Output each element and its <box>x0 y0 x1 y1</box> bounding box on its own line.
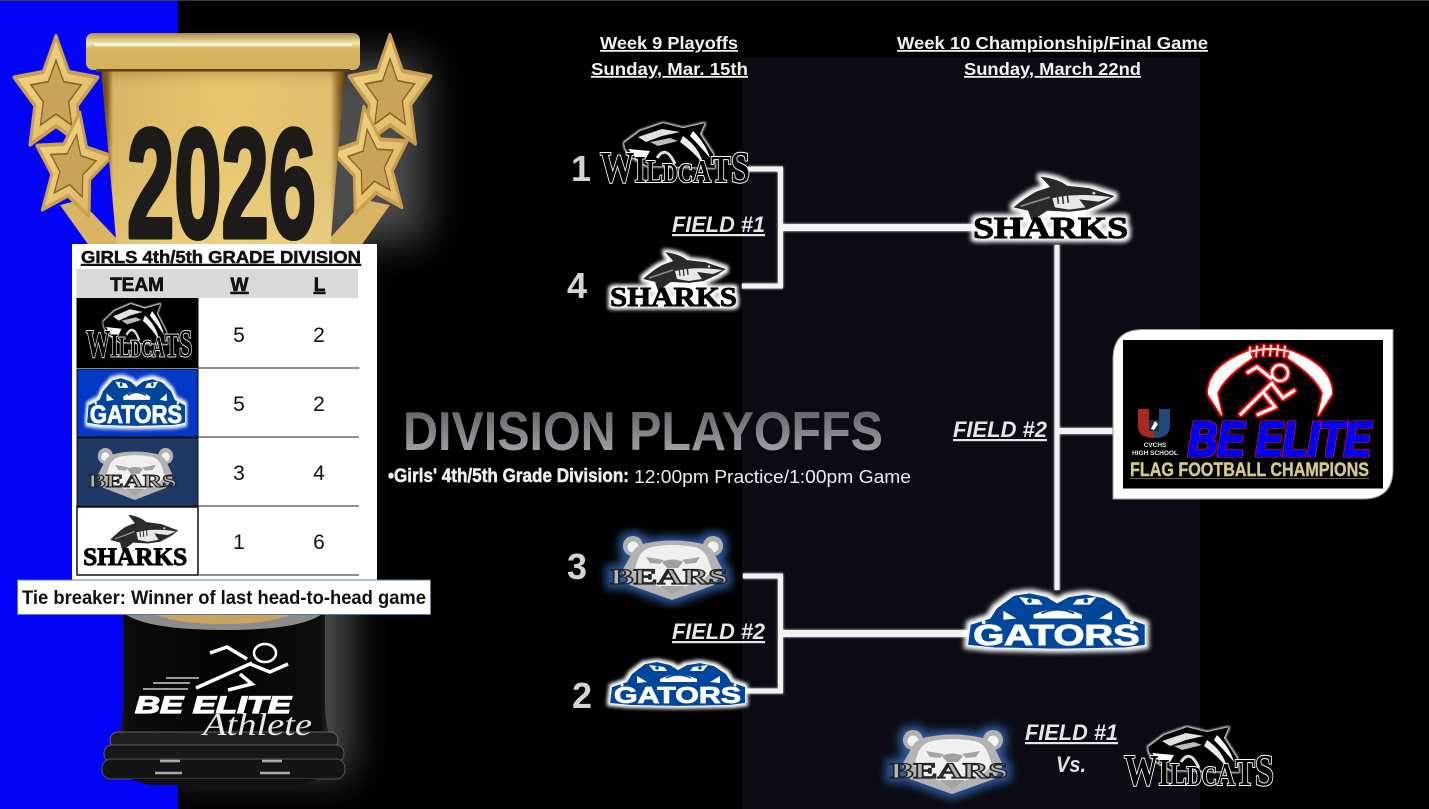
row: Wildcats: 5 <box>233 324 245 347</box>
bracket lines <box>742 169 1115 691</box>
heading: week 10: Sunday, March 22nd <box>964 59 1141 79</box>
table header: W <box>231 275 249 296</box>
logo: Sharks finalist <box>973 177 1128 245</box>
logo: Bears: BEARS <box>88 471 177 491</box>
heading: week 9: Week 9 Playoffs <box>600 33 738 53</box>
label: field 1 semifinal: FIELD #1 <box>672 212 765 237</box>
base foot <box>102 732 345 785</box>
row: Sharks: 1 <box>233 531 245 554</box>
schedule line <box>388 466 911 487</box>
schedule line: •Girls' 4th/5th Grade Division: <box>388 466 629 487</box>
seed 1: 1 <box>571 148 591 189</box>
icon: gold trophy <box>14 33 431 270</box>
row: Wildcats <box>76 298 325 368</box>
label: field 2 semifinal: FIELD #2 <box>672 619 766 644</box>
Be Elite athlete logo: BE ELITE <box>135 692 292 719</box>
schedule line: 12:00pm Practice/1:00pm Game <box>634 466 911 487</box>
row: Gators: 2 <box>313 393 325 416</box>
row: Sharks: 6 <box>313 531 325 554</box>
table header: TEAM <box>110 275 164 296</box>
table header <box>76 269 358 298</box>
row: Sharks <box>77 507 325 575</box>
heading: week 9: Sunday, Mar. 15th <box>591 59 748 79</box>
row: Wildcats: 2 <box>313 324 325 347</box>
base column <box>117 612 331 738</box>
base gold rim <box>125 614 322 630</box>
trophy rim <box>86 33 360 72</box>
heading: week 10 <box>897 33 1208 79</box>
row: Bears: 3 <box>233 462 245 485</box>
Be Elite athlete logo: Athlete <box>201 706 312 742</box>
trophy base <box>102 612 345 785</box>
year 2026: 2026 <box>127 97 316 270</box>
label: versus: Vs. <box>1056 752 1086 777</box>
flag football champions: FLAG FOOTBALL CHAMPIONS <box>1130 460 1369 481</box>
logo: Wildcats seed 1 <box>600 123 750 192</box>
school name: HIGH SCHOOL <box>1132 450 1178 457</box>
title: division playoffs: DIVISION PLAYOFFS <box>403 400 883 462</box>
callout: tie breaker: Tie breaker: Winner of last head-to-head game <box>22 588 426 609</box>
row: Gators <box>77 369 325 437</box>
logo: Sharks: SHARKS <box>83 544 187 571</box>
row: Bears <box>77 438 325 506</box>
logo: Bears seed 3 <box>610 536 728 600</box>
row: Gators: 5 <box>233 393 245 416</box>
seed 2: 2 <box>572 675 592 716</box>
callout: tie breaker <box>18 580 430 614</box>
logo: Sharks finalist: SHARKS <box>973 211 1128 245</box>
logo: Bears consolation <box>890 730 1008 794</box>
heading: week 9 <box>591 33 748 79</box>
icon: football outline <box>1208 345 1332 416</box>
label: field 2 final: FIELD #2 <box>953 417 1048 442</box>
icon: running figure <box>143 644 288 690</box>
logo: Wildcats consolation: WILDCATS <box>1124 746 1274 795</box>
trophy glow <box>170 60 425 775</box>
label: field 1 consolation: FIELD #1 <box>1025 720 1118 745</box>
heading: week 10: Week 10 Championship/Final Game <box>897 33 1208 53</box>
logo: Wildcats seed 1: WILDCATS <box>600 143 750 192</box>
panel: champions logo <box>1113 330 1393 499</box>
logo: Sharks seed 4 <box>610 252 737 312</box>
logo: Wildcats: WILDCATS <box>86 321 192 365</box>
icon: school U shield <box>1138 409 1170 438</box>
logo: Gators seed 2 <box>610 662 745 708</box>
logo: Bears consolation: BEARS <box>890 758 1008 783</box>
school name <box>1132 442 1178 457</box>
icon: neon runner <box>1240 365 1295 415</box>
logo: Bears <box>88 448 177 500</box>
logo: Sharks <box>83 515 187 571</box>
seed 3: 3 <box>567 546 587 587</box>
table header: L <box>314 275 326 296</box>
logo: Gators finalist <box>968 593 1145 652</box>
logo: Bears seed 3: BEARS <box>610 564 728 589</box>
school name: CVCHS <box>1144 442 1167 449</box>
trophy cup body <box>101 70 345 250</box>
trophy stars <box>14 35 431 250</box>
logo: Gators seed 2: GATORS <box>614 682 741 708</box>
logo: Sharks seed 4: SHARKS <box>610 282 737 312</box>
seed 4: 4 <box>567 265 587 306</box>
Be Elite athlete logo <box>135 644 312 742</box>
logo: Gators <box>87 378 185 429</box>
logo: Gators finalist: GATORS <box>973 619 1140 652</box>
table title: GIRLS 4th/5th GRADE DIVISION <box>81 247 361 267</box>
row: Bears: 4 <box>313 462 325 485</box>
panel: standings table <box>72 244 377 581</box>
logo: Gators: GATORS <box>90 400 182 429</box>
Be Elite wordmark: BE ELITE <box>1188 413 1372 467</box>
